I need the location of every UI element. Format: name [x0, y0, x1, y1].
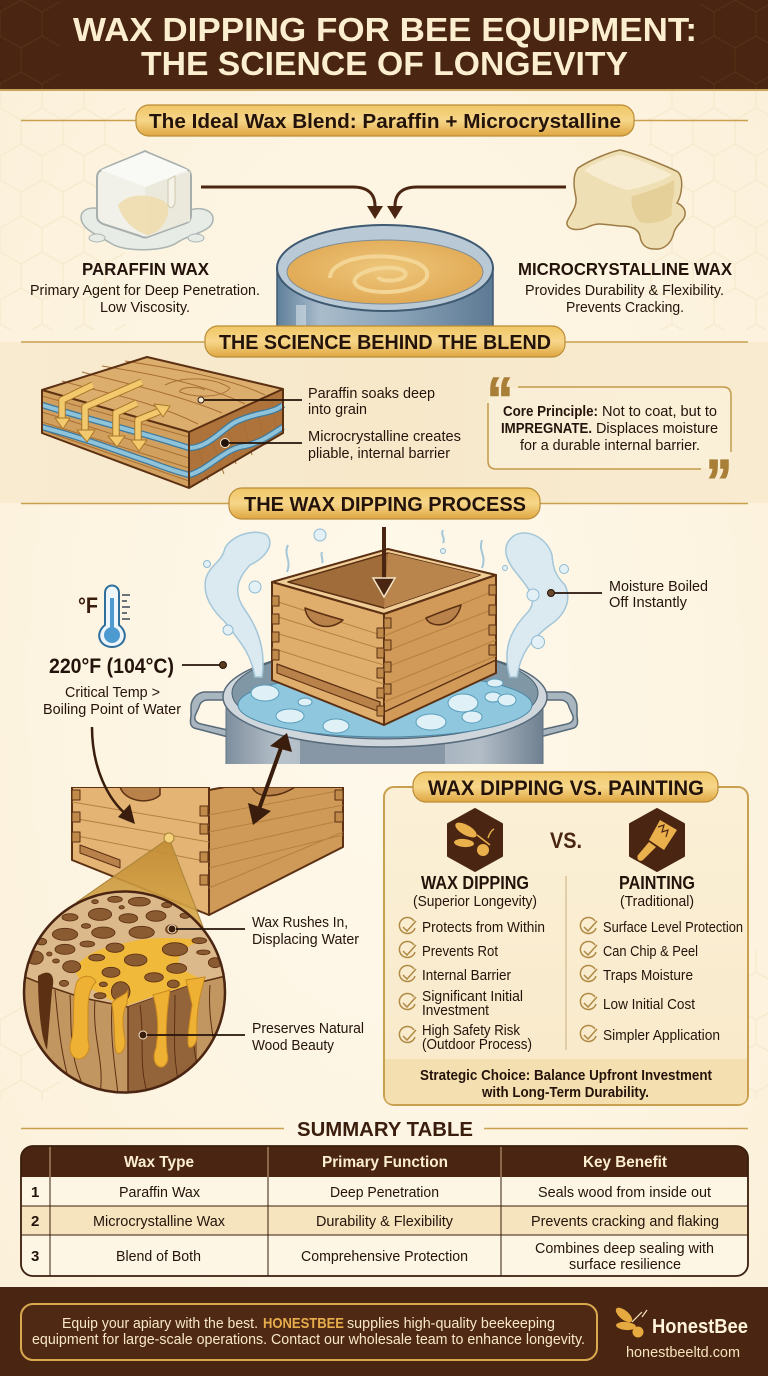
row 2: Prevents cracking and flaking [531, 1213, 719, 1230]
steam right [440, 530, 568, 677]
callout: microcrystalline barrier [220, 428, 461, 462]
row 3: Comprehensive Protection [301, 1248, 468, 1265]
illustration: magnified wood cell structure [20, 890, 230, 1100]
icon: thermometer [78, 586, 130, 647]
callout: wax rushes in: Wax Rushes In, [252, 914, 348, 931]
checklist icons [399, 918, 416, 1043]
row 1: Deep Penetration [330, 1184, 439, 1201]
logo: HonestBee: honestbeeltd.com [626, 1344, 740, 1361]
heading: vs: WAX DIPPING VS. PAINTING [428, 777, 704, 800]
text: microcrystalline wax: Provides Durability & Flexibility. [525, 282, 724, 299]
callout: microcrystalline barrier: pliable, internal barrier [308, 445, 450, 462]
table header: Wax Type [124, 1154, 194, 1171]
column: wax dipping: High Safety Risk [422, 1022, 520, 1039]
callout: moisture boiled off [548, 578, 708, 611]
section heading: ideal wax blend: The Ideal Wax Blend: Paraffin + Microcrystalline [149, 111, 621, 133]
heading: summary table: SUMMARY TABLE [297, 1118, 473, 1141]
bubbles in water [251, 679, 516, 733]
text: paraffin wax: Low Viscosity. [100, 299, 190, 316]
strategic choice band [385, 1059, 747, 1104]
callout: core principle quote: Not to coat, but to [602, 403, 717, 420]
row 3: Blend of Both [116, 1248, 201, 1265]
text: microcrystalline wax [518, 259, 732, 316]
arrows: paraffin penetration [55, 382, 170, 451]
row 1 [31, 1184, 712, 1201]
row 1: Paraffin Wax [119, 1184, 200, 1201]
column: wax dipping: Investment [422, 1002, 490, 1019]
title [73, 11, 697, 82]
diagram: wood block cross-section [42, 357, 283, 488]
row 1: Seals wood from inside out [538, 1184, 712, 1201]
table header [124, 1154, 668, 1171]
column: painting [580, 873, 743, 1044]
section heading: ideal wax blend [21, 105, 748, 136]
column: painting: (Traditional) [620, 893, 694, 910]
column: wax dipping: (Superior Longevity) [413, 893, 537, 910]
icon: paraffin wax cube [81, 151, 213, 250]
callout: core principle quote: ” [706, 448, 732, 517]
icon: thermometer: °F [78, 593, 98, 618]
arrow: dip down [373, 527, 395, 597]
callout: moisture boiled off: Off Instantly [609, 594, 687, 611]
row 3 [31, 1240, 714, 1273]
callout: critical temperature: Boiling Point of Water [43, 701, 181, 718]
callout: core principle quote [487, 366, 732, 517]
table header: Key Benefit [583, 1154, 668, 1171]
row 3: Combines deep sealing with [535, 1240, 714, 1257]
dark split [38, 973, 53, 1050]
callout: paraffin soaks: Paraffin soaks deep [308, 385, 435, 402]
column: wax dipping: WAX DIPPING [421, 873, 529, 893]
row 3: surface resilience [569, 1256, 681, 1273]
icon: stockpot [190, 660, 578, 764]
callout: core principle quote: “ [487, 366, 513, 435]
text: microcrystalline wax: MICROCRYSTALLINE WAX [518, 259, 732, 279]
text: paraffin wax: PARAFFIN WAX [82, 259, 209, 279]
column: painting: Simpler Application [603, 1027, 720, 1044]
column: wax dipping: Significant Initial [422, 988, 523, 1005]
panel: science behind the blend [0, 326, 768, 517]
text: paraffin wax [30, 259, 260, 316]
wax pooled between cells [75, 938, 205, 1005]
wax drips [70, 976, 205, 1067]
icon: hive box [272, 549, 496, 725]
summary table [21, 1146, 748, 1276]
icon: painting hexagon [630, 809, 684, 871]
callout: core principle quote: IMPREGNATE. [501, 420, 592, 437]
header banner [0, 0, 768, 91]
table header: Primary Function [322, 1154, 448, 1171]
callout: preserves natural beauty [139, 1020, 364, 1054]
arrows into pot [201, 187, 566, 219]
side-grain wood face [25, 976, 224, 1092]
end-grain cell holes [27, 896, 222, 1002]
panel: wax dipping vs painting [384, 772, 748, 1105]
callout: preserves natural beauty: Wood Beauty [252, 1037, 334, 1054]
arrow: double-headed immersion [248, 733, 292, 825]
section heading: wax dipping process: THE WAX DIPPING PROCESS [244, 494, 526, 516]
logo: HonestBee [613, 1305, 748, 1361]
row 3: 3 [31, 1248, 39, 1265]
column: painting: PAINTING [619, 873, 695, 893]
callout: critical temperature: 220°F (104°C) [49, 655, 174, 678]
section heading: science: THE SCIENCE BEHIND THE BLEND [219, 332, 551, 354]
callout: critical temperature: Critical Temp > [65, 684, 160, 701]
arrow: curve to box [92, 727, 135, 824]
call to action box: equipment for large-scale operations. Contact our wholesale team to enhance longevity. [32, 1331, 585, 1348]
callout: preserves natural beauty: Preserves Natural [252, 1020, 364, 1037]
text: vs: VS. [550, 828, 582, 853]
column: wax dipping: Internal Barrier [422, 967, 511, 984]
callout: microcrystalline barrier: Microcrystalline creates [308, 428, 461, 445]
logo: HonestBee: HonestBee [652, 1316, 748, 1338]
callout: wax rushes in [168, 914, 359, 948]
steam left [204, 529, 326, 677]
column: painting: Surface Level Protection [603, 919, 743, 936]
row 2: 2 [31, 1213, 39, 1230]
icon: microcrystalline wax block [567, 150, 685, 249]
callout: core principle quote: Displaces moisture [596, 420, 718, 437]
strategic choice band: Strategic Choice: Balance Upfront Investment [420, 1067, 712, 1084]
section heading: wax dipping process [21, 488, 748, 519]
section heading: science [21, 326, 748, 357]
row 2 [31, 1213, 719, 1230]
callout: core principle quote: Core Principle: [503, 403, 598, 420]
call to action box [21, 1304, 597, 1360]
callout: wax rushes in: Displacing Water [252, 931, 359, 948]
icon: melting pot with blended wax [277, 225, 493, 330]
text: paraffin wax: Primary Agent for Deep Penetration. [30, 282, 260, 299]
column: wax dipping: Protects from Within [422, 919, 545, 936]
call to action box: Equip your apiary with the best. [62, 1315, 258, 1332]
callout: core principle quote: for a durable internal barrier. [520, 437, 700, 454]
column: wax dipping [399, 873, 545, 1053]
strategic choice band: with Long-Term Durability. [481, 1084, 649, 1101]
illustration: zoomed hive box corner [72, 787, 343, 915]
column: wax dipping: Prevents Rot [422, 943, 499, 960]
row 2: Durability & Flexibility [316, 1213, 453, 1230]
callout: critical temperature [43, 655, 226, 718]
illustration: hive box in boiling wax pot [190, 527, 578, 772]
footer [0, 1287, 768, 1376]
checklist icons [580, 918, 597, 1042]
title: THE SCIENCE OF LONGEVITY [141, 45, 628, 82]
callout: paraffin soaks [198, 385, 435, 418]
call to action box: HONESTBEE [263, 1315, 344, 1332]
column: painting: Traps Moisture [603, 967, 693, 984]
title: WAX DIPPING FOR BEE EQUIPMENT: [73, 11, 697, 48]
row 1: 1 [31, 1184, 39, 1201]
callout: paraffin soaks: into grain [308, 401, 367, 418]
magnifier cone [77, 833, 203, 927]
column: wax dipping: (Outdoor Process) [422, 1036, 532, 1053]
column: painting: Low Initial Cost [603, 996, 696, 1013]
text: microcrystalline wax: Prevents Cracking. [566, 299, 684, 316]
icon: wax dipping hexagon [448, 809, 502, 871]
callout: moisture boiled off: Moisture Boiled [609, 578, 708, 595]
column: painting: Can Chip & Peel [603, 943, 698, 960]
call to action box: supplies high-quality beekeeping [347, 1315, 555, 1332]
row 2: Microcrystalline Wax [93, 1213, 225, 1230]
